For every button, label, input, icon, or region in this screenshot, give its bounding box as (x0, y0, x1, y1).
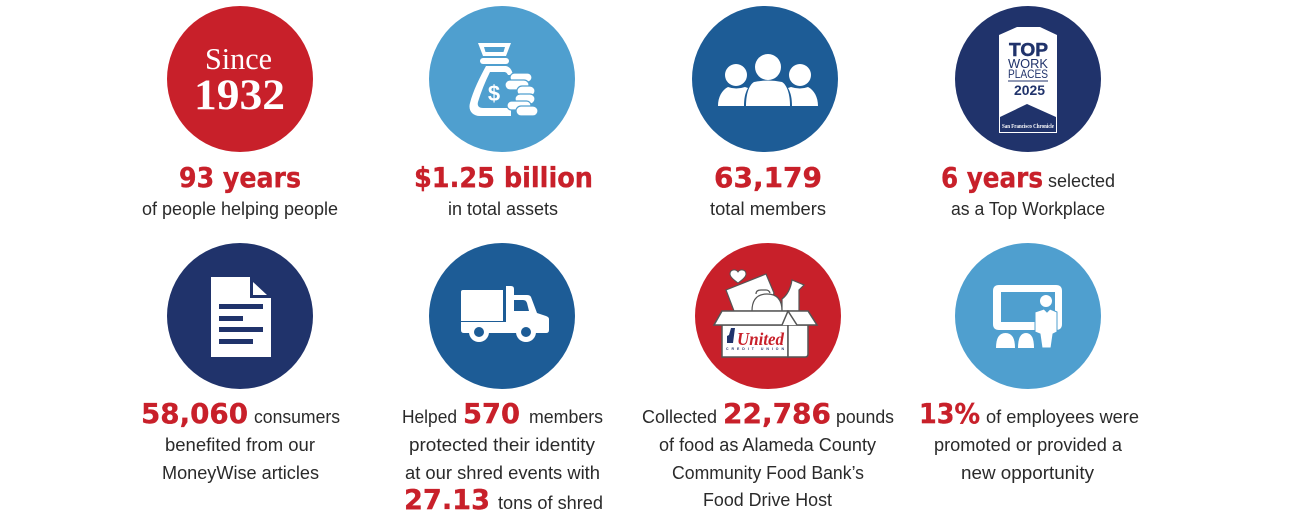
caption (405, 435, 600, 483)
panel: top workplace (941, 6, 1115, 219)
icon: presenter at board (955, 243, 1101, 389)
stat: 570 members (402, 397, 603, 430)
caption (162, 407, 340, 483)
caption: MoneyWise articles (162, 463, 319, 483)
panel: since 1932 (142, 6, 338, 219)
stat: 22,786 pounds: pounds (836, 407, 894, 427)
icon: top workplaces 2025 ribbon: PLACES (1008, 67, 1048, 81)
icon: truck (429, 243, 575, 389)
stat: 570 members: Helped (402, 407, 457, 427)
stat: 58,060: 58,060 (141, 397, 248, 430)
icon: since 1932 badge: Since (205, 41, 272, 76)
caption: new opportunity (961, 463, 1094, 483)
caption: Community Food Bank’s (672, 463, 864, 483)
stat: 6 years: 6 years (941, 161, 1043, 194)
panel: shred events (402, 243, 603, 516)
icon: top workplaces 2025 ribbon: TOP (1009, 40, 1048, 60)
icon: since 1932 badge: 1932 (194, 72, 285, 119)
icon: top workplaces 2025 ribbon (955, 6, 1101, 152)
icon: money bag and coins (429, 6, 575, 152)
caption: at our shred events with (405, 463, 600, 483)
icon: top workplaces 2025 ribbon: WORK (1008, 57, 1049, 71)
caption: of food as Alameda County (659, 435, 876, 455)
caption: total members (710, 199, 826, 219)
icon: top workplaces 2025 ribbon: 2025 (1014, 82, 1045, 98)
stat: 22,786 pounds: Collected (642, 407, 717, 427)
caption: Food Drive Host (703, 490, 832, 510)
caption (934, 407, 1139, 483)
stat: 27.13 tons (404, 483, 603, 516)
icon: document (167, 243, 313, 389)
stat: 570 members: 570 (463, 397, 520, 430)
stat: 22,786 pounds (642, 397, 894, 430)
stat: $1.25 billion: $1.25 billion (414, 161, 593, 194)
stat: 27.13 tons: 27.13 (404, 483, 490, 516)
caption: consumers (254, 407, 340, 427)
icon: food donation box: CREDIT UNION (726, 347, 784, 351)
caption: benefited from our (165, 435, 315, 455)
caption: of people helping people (142, 199, 338, 219)
stat: 22,786 pounds: 22,786 (723, 397, 831, 430)
stat: 93 years: 93 years (179, 161, 301, 194)
caption: promoted or provided a (934, 435, 1123, 455)
icon: food donation box (695, 243, 841, 389)
icon: money bag and coins: $ (488, 81, 500, 106)
icon: food donation box: United (737, 329, 785, 349)
icon: since 1932 badge (167, 6, 313, 152)
panel: total assets (414, 6, 593, 219)
caption (659, 435, 876, 510)
icon: top workplaces 2025 ribbon: San Francisco Chronicle (1002, 124, 1054, 130)
stat: 570 members: members (529, 407, 603, 427)
caption line 2: as a Top Workplace (951, 199, 1105, 219)
panel: moneywise articles (141, 243, 340, 483)
icon: group of people (692, 6, 838, 152)
stat: 13%: 13% (919, 397, 980, 430)
caption: of employees were (986, 407, 1139, 427)
caption: selected (1048, 171, 1115, 191)
stat: 63,179: 63,179 (714, 161, 822, 194)
stat: 27.13 tons: tons of shred (498, 493, 603, 513)
panel: food drive (642, 243, 894, 510)
panel: employee promotion (919, 243, 1139, 483)
caption: in total assets (448, 199, 558, 219)
panel: total members (692, 6, 838, 219)
caption: protected their identity (409, 435, 595, 455)
